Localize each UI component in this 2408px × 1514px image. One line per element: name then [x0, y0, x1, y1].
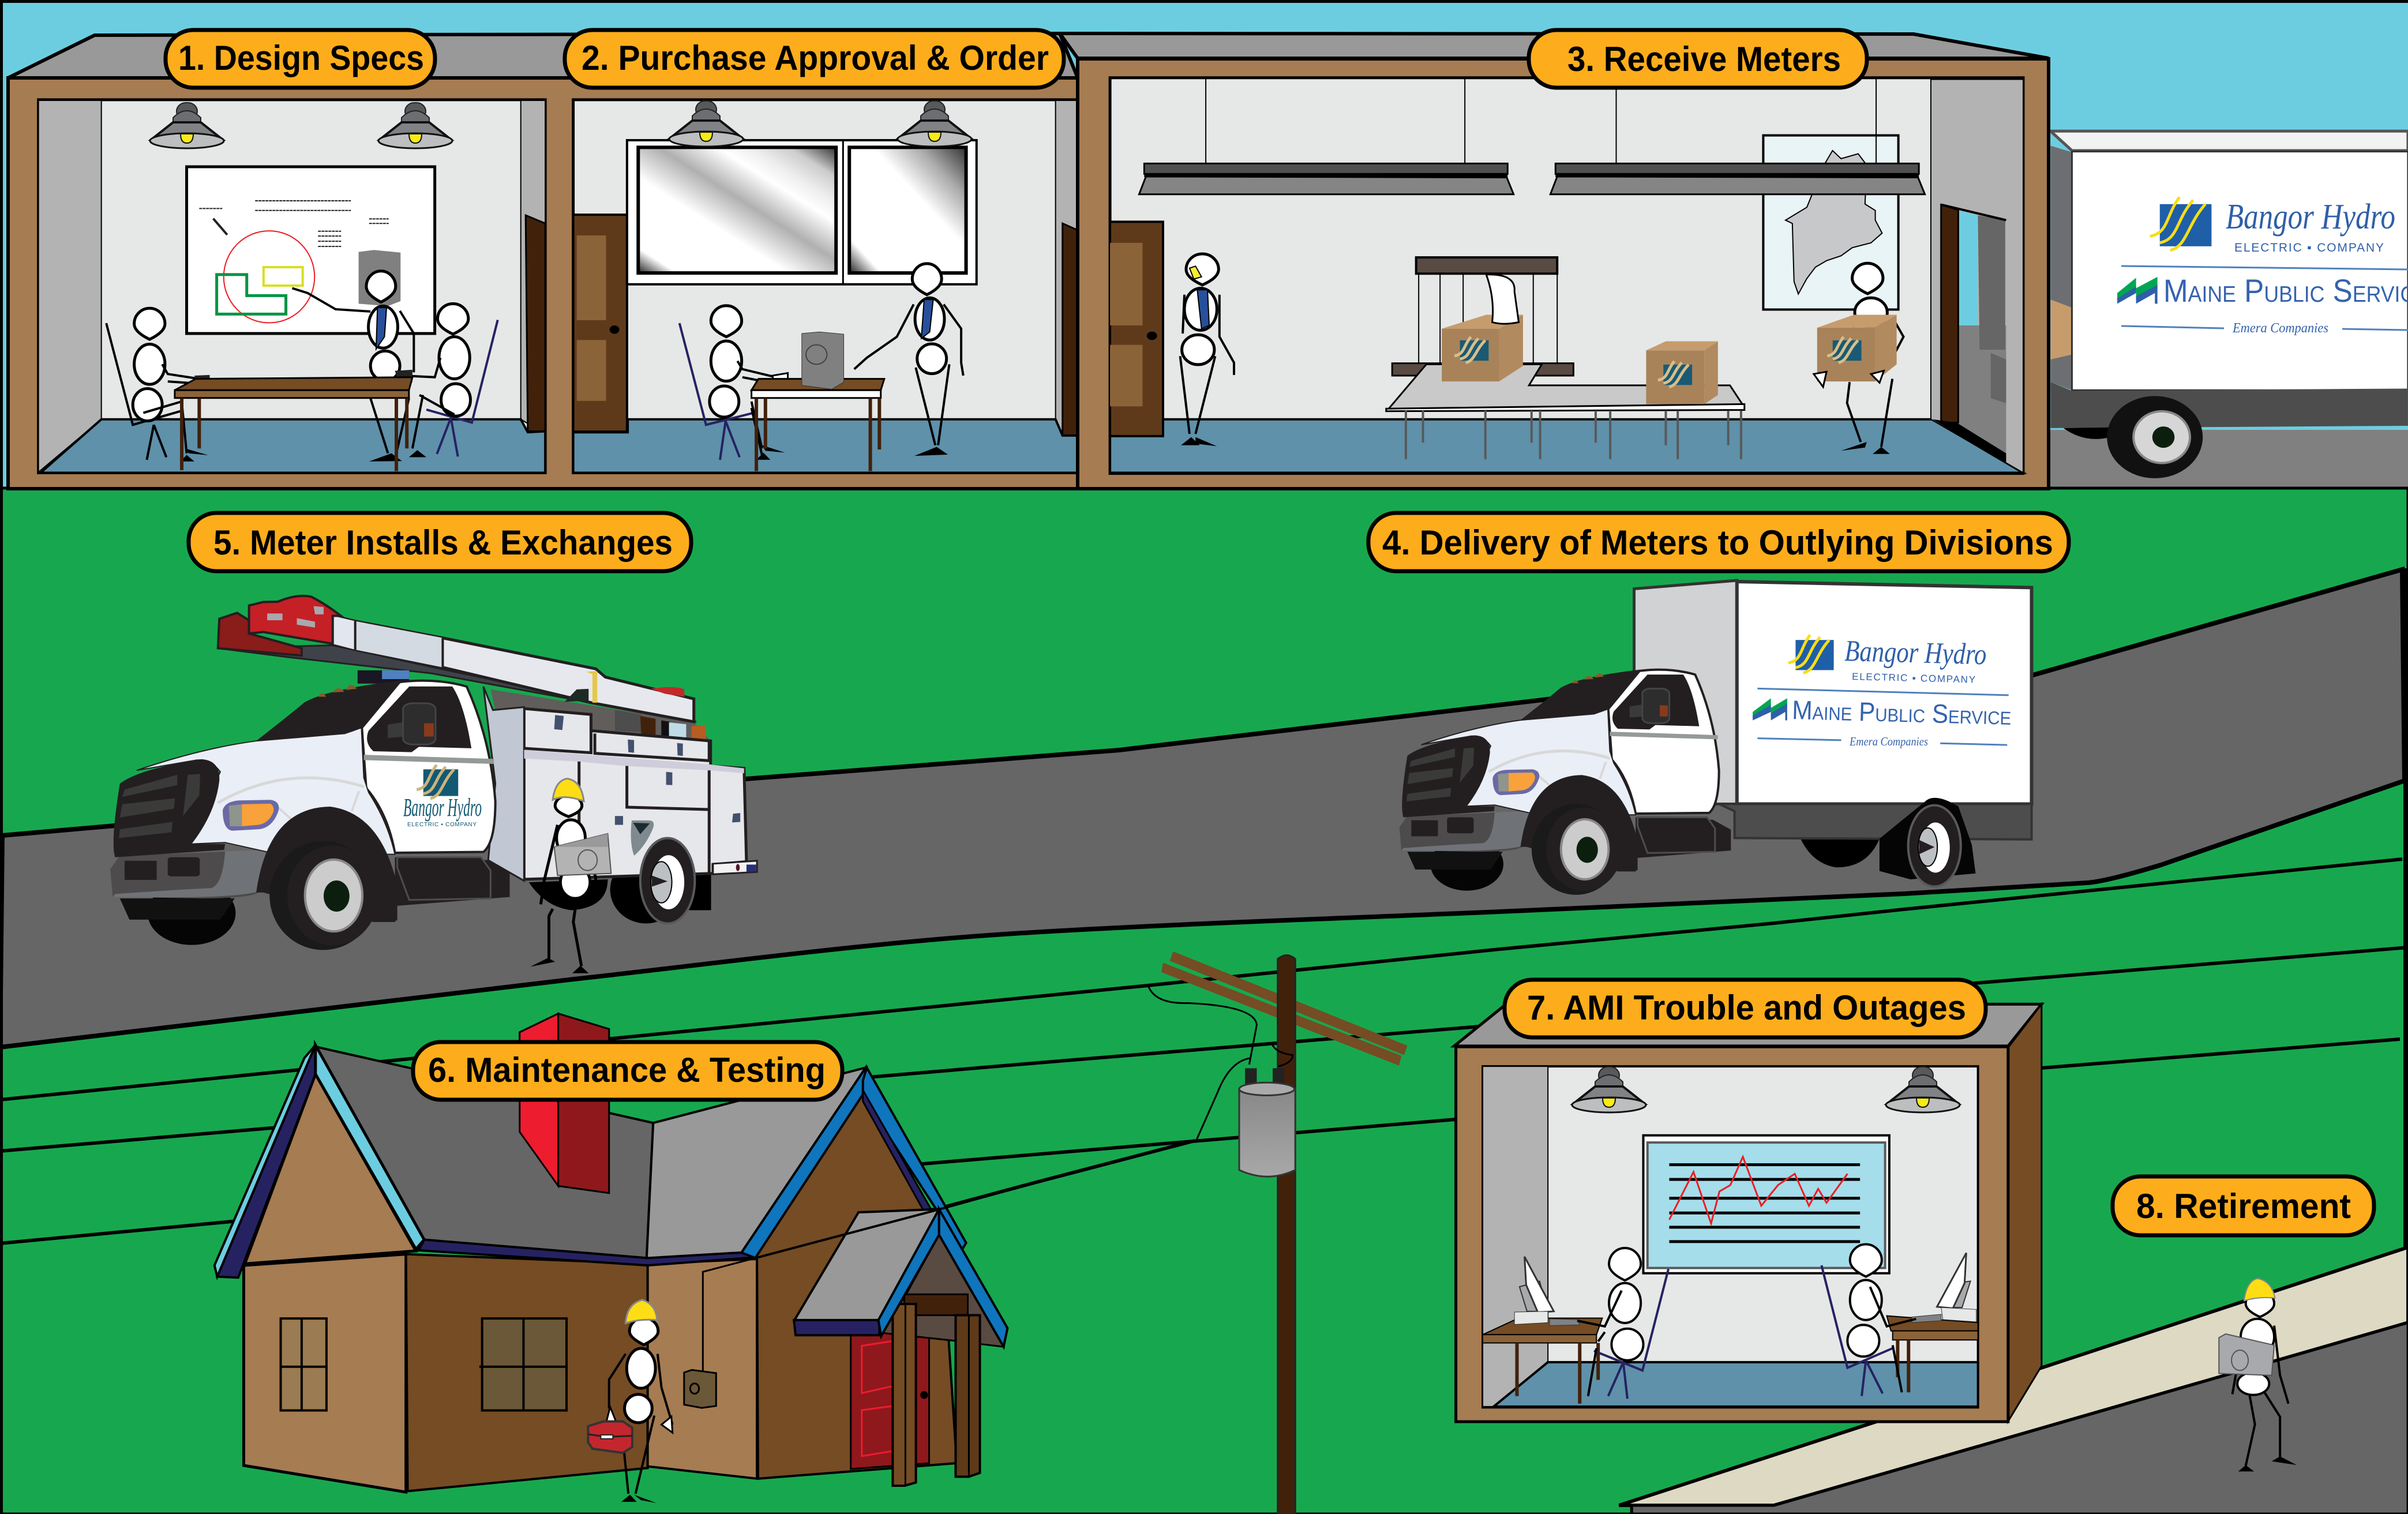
- roof: [1454, 1004, 2042, 1046]
- body side panel: [483, 687, 524, 881]
- label 1: 1. Design Specs: [178, 39, 424, 77]
- rear wheel front face: [640, 838, 695, 924]
- label 8: 8. Retirement: [2136, 1187, 2351, 1226]
- right operator: [1821, 1244, 1916, 1396]
- room 2 door: [573, 215, 627, 432]
- meter on wall: [684, 1370, 716, 1408]
- purchase table: [752, 379, 884, 471]
- truck door logo: [417, 765, 458, 799]
- porch posts: [892, 1304, 980, 1486]
- room 1 right wall: [521, 100, 545, 434]
- truck chassis: [1719, 804, 2032, 840]
- tool box: [588, 1421, 632, 1453]
- room 1 left wall: [39, 100, 102, 472]
- right computer desk: [1887, 1316, 1978, 1392]
- worker with meter by truck: [529, 778, 611, 973]
- label 5: 5. Meter Installs & Exchanges: [213, 523, 673, 562]
- cargo box white panel: [1737, 582, 2032, 804]
- utility truck: [110, 596, 757, 950]
- center window: [479, 1318, 567, 1411]
- transformer wires: [1148, 985, 1293, 1140]
- AMI operations room: [1454, 1004, 2297, 1471]
- sky background: [0, 0, 2408, 490]
- whiteboard design drawing: [187, 167, 435, 333]
- body vent: [631, 820, 654, 856]
- rear bumper: [713, 861, 757, 874]
- brand: Emera Companies: Emera Companies: [1849, 734, 1928, 748]
- left page edge: [0, 0, 3, 1514]
- AMI room lamp right: [1886, 1067, 1960, 1112]
- delivery truck: [1400, 580, 2032, 895]
- truck at loading dock: [2050, 131, 2408, 478]
- box on table: [1646, 342, 1718, 404]
- room 1 lamp right: [378, 103, 452, 148]
- warehouse door: [1110, 222, 1163, 436]
- Maine Public Service icon: [1753, 698, 1787, 720]
- room 2 lamp left: [669, 101, 743, 147]
- truck white panel: [2072, 152, 2408, 390]
- cargo truck cab: [1400, 670, 1731, 895]
- floor: [1494, 1362, 1978, 1407]
- truck side: [2050, 146, 2072, 390]
- ceiling light left: [1139, 163, 1514, 194]
- rule lines: [1757, 688, 2009, 745]
- warehouse back wall: [1110, 78, 2023, 473]
- left computer desk: [1483, 1318, 1602, 1404]
- room 1 wall: [39, 100, 545, 473]
- porch interior: [882, 1235, 1004, 1347]
- door brand: electric company: ELECTRIC ▪ COMPANY: [407, 822, 477, 828]
- porch roof: [794, 1209, 939, 1321]
- pole: [1278, 955, 1295, 1514]
- torso: [557, 820, 585, 856]
- right roof: [647, 1067, 866, 1259]
- standing buyer figure: [854, 264, 963, 456]
- front wall dark: [406, 1254, 648, 1491]
- frame: [1456, 1047, 2008, 1422]
- warehouse roof: [1060, 33, 2049, 58]
- latches: [554, 715, 740, 825]
- service mast: [703, 1257, 758, 1371]
- truck lower chassis: [2050, 382, 2408, 428]
- utility truck cab: [110, 681, 509, 950]
- room 2 right wall: [1056, 100, 1079, 436]
- right wall dark: [757, 1093, 957, 1479]
- brand: Maine Public Service: Maine Public Service: [1792, 695, 2012, 730]
- truck rule lines: [2121, 266, 2408, 330]
- carried meter: [554, 834, 611, 875]
- hanging wires: [1206, 78, 1876, 163]
- service wire over porch: [758, 1182, 1038, 1257]
- bay behind compartments: [490, 689, 711, 741]
- right page edge: [2403, 568, 2408, 1514]
- shadow shape: [529, 879, 607, 910]
- wall: [1483, 1066, 1978, 1407]
- office roof: [8, 33, 1078, 78]
- brand: electric company: ELECTRIC ▪ COMPANY: [1852, 671, 1975, 685]
- boom: [333, 616, 694, 722]
- wire B: [0, 947, 2408, 1151]
- sidewalk: [1619, 1247, 2408, 1514]
- brand: Bangor Hydro: Bangor Hydro: [1844, 635, 1987, 671]
- label 3: [1529, 30, 1867, 88]
- rear wheel and fender: [1880, 798, 1976, 887]
- room contents: [39, 100, 1079, 473]
- boom bracket: [586, 671, 597, 703]
- label 2: 2. Purchase Approval & Order: [582, 39, 1049, 77]
- truck brand: Emera: Emera Companies: [2232, 321, 2328, 336]
- label 5: [189, 513, 691, 571]
- boom underside: [218, 645, 696, 722]
- house: [215, 1014, 1038, 1503]
- crossarm: [1161, 951, 1408, 1066]
- side wall: [2008, 1004, 2042, 1421]
- truck brand: electric company: ELECTRIC ▪ COMPANY: [2234, 241, 2384, 254]
- hard hat: [553, 778, 584, 801]
- seated purchaser figure: [680, 306, 788, 460]
- chimney lower: [520, 1014, 609, 1193]
- meter on table: [802, 332, 844, 389]
- left gable trim: [217, 1045, 316, 1277]
- building: receiving warehouse: [1060, 33, 2049, 489]
- logo icon: [2150, 197, 2211, 250]
- rear tire shadow: [1801, 839, 1880, 867]
- wire C: [0, 1039, 2400, 1243]
- label 7: [1505, 980, 1986, 1037]
- warehouse floor: [1110, 419, 2023, 473]
- service drop to house: [703, 1141, 1195, 1371]
- left gable: [245, 1074, 416, 1264]
- design table: [175, 377, 412, 471]
- seated figure right: [395, 303, 498, 457]
- test machine: [1386, 257, 1745, 459]
- wire A: [0, 859, 2402, 1100]
- ceiling light right: [1550, 163, 1925, 194]
- warehouse frame: [1078, 59, 2049, 489]
- compartment outlines: [524, 714, 709, 878]
- utility body: [524, 709, 747, 879]
- left computer: [1514, 1257, 1580, 1326]
- road: [0, 569, 2405, 1047]
- phone worker figure: [1180, 254, 1234, 446]
- monitoring screen chart: [1643, 1136, 1889, 1273]
- label 3: 3. Receive Meters: [1567, 40, 1841, 78]
- room 2 floor: [573, 419, 1079, 473]
- room 2 lamp right: [898, 101, 972, 147]
- left operator: [1577, 1248, 1668, 1399]
- head: [555, 796, 582, 816]
- limbs: [541, 825, 596, 966]
- eave trim: [419, 1240, 755, 1265]
- feet: [530, 958, 588, 973]
- left wall lighter: [243, 1254, 406, 1492]
- wheel: [2064, 396, 2203, 478]
- sky top border: [0, 0, 2408, 3]
- right gable trim: [741, 1067, 867, 1258]
- MPS icon: [2117, 277, 2158, 303]
- porch gable trim: [879, 1209, 939, 1336]
- map of Maine: [1763, 136, 1899, 310]
- box visible through truck gap: [2050, 299, 2072, 359]
- room 2 right door: [1063, 223, 1079, 436]
- right computer: [1912, 1253, 1976, 1322]
- window: [627, 140, 977, 284]
- label 4: 4. Delivery of Meters to Outlying Divisions: [1382, 523, 2053, 562]
- office frame: [8, 78, 1078, 489]
- warehouse worker carrying box: [1814, 263, 1903, 454]
- logo icon: [1788, 635, 1834, 673]
- loading door: [1933, 205, 2006, 464]
- room 1 lamp left: [150, 103, 224, 148]
- hips: [560, 866, 590, 898]
- presenter figure: [292, 271, 414, 462]
- label 2: [565, 30, 1064, 88]
- AMI room lamp left: [1572, 1067, 1646, 1112]
- box on machine: [1442, 275, 1523, 381]
- room 1 door: [526, 215, 545, 432]
- hoist post: [358, 670, 409, 684]
- chimney upper: [520, 1014, 609, 1193]
- transformer: [1239, 1068, 1295, 1176]
- label 7: 7. AMI Trouble and Outages: [1527, 988, 1966, 1027]
- utility pole with transformer: [1148, 951, 1408, 1514]
- green lawn: [0, 488, 2408, 1514]
- label 6: 6. Maintenance & Testing: [428, 1051, 826, 1089]
- left window: [281, 1318, 327, 1411]
- seated figure left: [106, 308, 210, 462]
- room 1 floor: [40, 419, 545, 473]
- meter on board: [359, 250, 400, 306]
- dark red bucket: [218, 613, 302, 655]
- room 2 wall: [573, 100, 1079, 473]
- purple rail: [524, 749, 744, 773]
- label 4: [1368, 513, 2069, 571]
- door brand: Bangor Hydro: Bangor Hydro: [403, 793, 482, 822]
- left roof: [316, 1047, 653, 1259]
- warehouse right wall: [1931, 79, 2023, 473]
- building: design and purchasing offices: [8, 33, 1079, 489]
- red bucket: [249, 596, 341, 644]
- cargo box side: [1634, 580, 1737, 804]
- left wall: [1483, 1066, 1548, 1407]
- retirement worker: [2219, 1279, 2297, 1471]
- label 8: [2113, 1176, 2374, 1235]
- center wall light: [648, 1259, 757, 1479]
- truck roof: [2050, 131, 2408, 151]
- label 6: [413, 1042, 842, 1100]
- power lines: [0, 859, 2408, 1371]
- rear wheel: [610, 856, 711, 924]
- label 1: [166, 30, 435, 88]
- front door: [851, 1331, 929, 1469]
- ground behind building: [2042, 430, 2408, 489]
- asphalt: [1631, 1322, 2408, 1514]
- maintenance worker: [606, 1300, 673, 1503]
